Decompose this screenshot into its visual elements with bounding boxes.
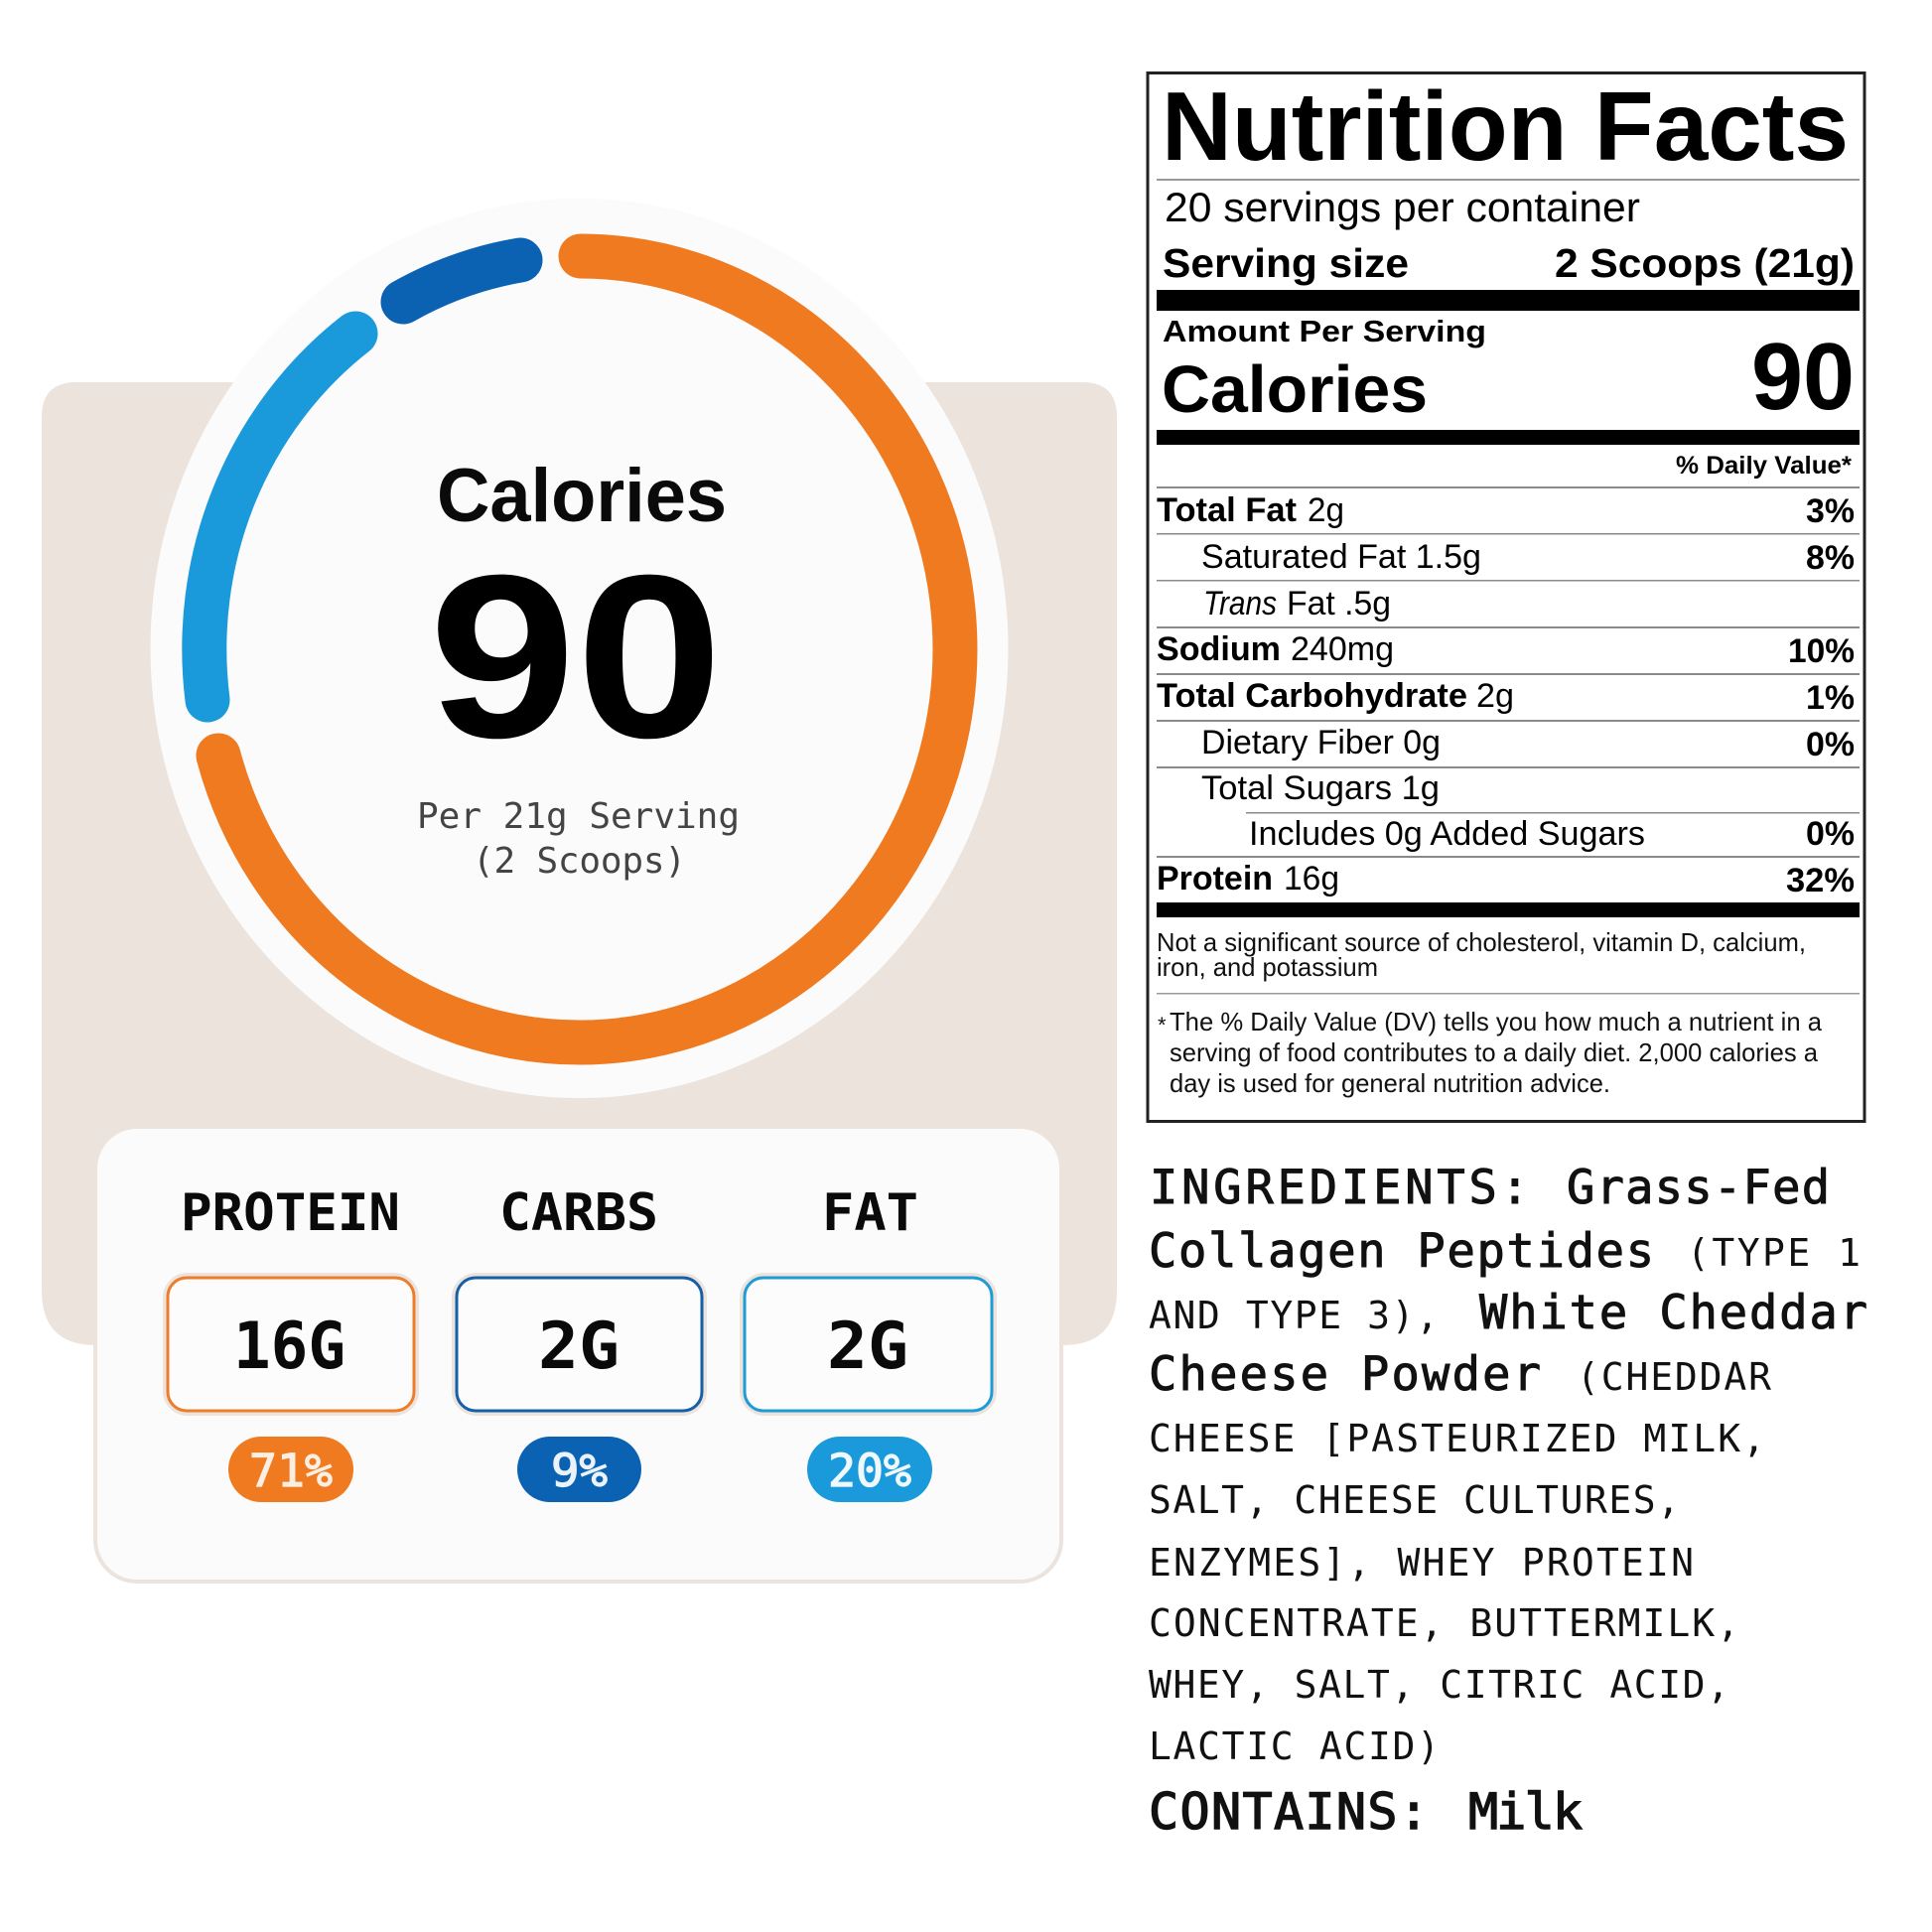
serving note: (2 Scoops) xyxy=(473,841,686,882)
macro box: carbs: 2G xyxy=(538,1310,620,1384)
row: protein: Protein xyxy=(1157,860,1273,897)
row: dietary fiber: Dietary Fiber 0g xyxy=(1201,724,1441,761)
panel: macro card xyxy=(95,1127,1061,1582)
ring segment: protein xyxy=(218,256,955,1042)
serving size: Serving size xyxy=(1163,240,1409,286)
pill: carbs percent: 9% xyxy=(551,1445,608,1497)
row: added sugars: Includes 0g Added Sugars xyxy=(1249,815,1645,853)
lines: sub-ingredients: SALT, CHEESE CULTURES, xyxy=(1149,1478,1680,1522)
ring segment: carbs xyxy=(403,260,520,302)
row: sodium: 240mg xyxy=(1291,630,1394,668)
row: total fat: 3% xyxy=(1806,492,1855,530)
servings: 20 servings per container xyxy=(1165,184,1640,230)
row: saturated fat: Saturated Fat 1.5g xyxy=(1201,538,1481,576)
panel: ingredients list xyxy=(1149,1161,1867,1841)
macro box: protein: 16G xyxy=(233,1310,345,1384)
lines: sub-ingredients xyxy=(1149,1417,1765,1768)
row: total carbohydrate xyxy=(1157,677,1855,717)
row: saturated fat xyxy=(1201,538,1855,577)
dial heading: Calories xyxy=(437,454,727,538)
lines: sub-ingredients: LACTIC ACID) xyxy=(1149,1725,1440,1768)
pill: fat percent xyxy=(807,1437,932,1502)
macro box: carbs xyxy=(455,1276,704,1413)
line: ingredients heading: INGREDIENTS: xyxy=(1150,1161,1529,1215)
serving note xyxy=(417,796,740,882)
line: cheese powder: (CHEDDAR xyxy=(1577,1355,1771,1399)
daily value heading: % Daily Value* xyxy=(1676,452,1852,480)
row: trans fat xyxy=(1203,585,1391,622)
line: white cheddar: White Cheddar xyxy=(1479,1286,1867,1340)
lines: sub-ingredients: CHEESE [PASTEURIZED MILK, xyxy=(1149,1417,1765,1460)
not a significant source note xyxy=(1157,927,1806,982)
line: contains allergen: Milk xyxy=(1468,1783,1583,1841)
lines: sub-ingredients: CONCENTRATE, BUTTERMILK, xyxy=(1149,1601,1739,1645)
calories row: 90 xyxy=(1751,324,1855,430)
row: dietary fiber: 0% xyxy=(1806,726,1855,763)
row: sodium: 10% xyxy=(1788,632,1855,670)
panel: nutrition facts label xyxy=(1148,71,1864,1122)
line: ingredients heading xyxy=(1150,1161,1830,1215)
daily value footnote: serving of food contributes to a daily diet. 2,000 calories a xyxy=(1170,1037,1819,1067)
line: white cheddar xyxy=(1149,1286,1867,1340)
row: trans fat: Fat .5g xyxy=(1287,585,1391,622)
macro labels xyxy=(181,1183,918,1243)
lines: sub-ingredients: ENZYMES], WHEY PROTEIN xyxy=(1149,1541,1694,1585)
macro labels: FAT xyxy=(822,1183,918,1243)
macro labels: PROTEIN xyxy=(181,1183,400,1243)
line: white cheddar: AND TYPE 3), xyxy=(1149,1294,1439,1337)
row: protein: 32% xyxy=(1786,862,1855,899)
panel: beige backdrop xyxy=(42,382,1117,1345)
line: contains allergen: CONTAINS: xyxy=(1149,1783,1429,1841)
serving size: 2 Scoops (21g) xyxy=(1555,240,1855,286)
nutrient rows xyxy=(1157,491,1855,899)
not a significant source note: iron, and potassium xyxy=(1157,952,1378,982)
lines: sub-ingredients: WHEY, SALT, CITRIC ACID, xyxy=(1149,1663,1729,1707)
row: total carbohydrate: 2g xyxy=(1476,677,1514,715)
row: sodium xyxy=(1157,630,1855,670)
row: trans fat: Trans xyxy=(1203,585,1277,622)
daily value footnote: * xyxy=(1158,1013,1167,1037)
row: protein: 16g xyxy=(1284,860,1339,897)
row: total sugars: Total Sugars 1g xyxy=(1201,769,1440,807)
serving note: Per 21g Serving xyxy=(417,796,740,837)
daily value footnote xyxy=(1158,1007,1823,1098)
card background xyxy=(95,1127,1061,1582)
pill: protein percent: 71% xyxy=(249,1445,333,1497)
amount per serving: Amount Per Serving xyxy=(1163,314,1486,348)
line: collagen peptides: Collagen Peptides xyxy=(1149,1224,1654,1279)
row: added sugars: 0% xyxy=(1806,815,1855,853)
line: contains allergen xyxy=(1149,1783,1583,1841)
macro box: fat xyxy=(743,1276,994,1413)
pill: protein percent xyxy=(228,1437,353,1502)
nutrient rules xyxy=(1157,486,1860,858)
row: total carbohydrate: 1% xyxy=(1806,679,1855,717)
white disc xyxy=(151,199,1009,1098)
panel: calorie dial xyxy=(151,199,1009,1098)
calories row: Calories xyxy=(1162,352,1428,427)
line: ingredients heading: Grass-Fed xyxy=(1567,1161,1830,1215)
macro labels: CARBS xyxy=(499,1183,658,1243)
daily value footnote: day is used for general nutrition advice. xyxy=(1170,1068,1610,1098)
calories row xyxy=(1162,324,1855,430)
row: saturated fat: 8% xyxy=(1806,539,1855,577)
row: total fat: 2g xyxy=(1308,491,1344,529)
serving size xyxy=(1163,240,1855,286)
row: dietary fiber xyxy=(1201,724,1855,763)
line: cheese powder xyxy=(1149,1347,1771,1402)
pill: carbs percent xyxy=(517,1437,641,1502)
row: total fat: Total Fat xyxy=(1157,491,1297,529)
macro box: fat: 2G xyxy=(827,1310,908,1384)
label title: Nutrition Facts xyxy=(1162,71,1849,181)
not a significant source note: Not a significant source of cholesterol, vitamin D, calcium, xyxy=(1157,927,1806,957)
row: protein xyxy=(1157,860,1855,899)
ring segment: fat xyxy=(205,334,355,700)
row: sodium: Sodium xyxy=(1157,630,1281,668)
macro box: protein xyxy=(166,1276,416,1413)
pill: fat percent: 20% xyxy=(828,1445,911,1497)
line: collagen peptides: (TYPE 1 xyxy=(1687,1231,1861,1275)
row: added sugars xyxy=(1249,815,1855,853)
daily value footnote: The % Daily Value (DV) tells you how much a nutrient in a xyxy=(1170,1007,1823,1036)
label border xyxy=(1148,73,1864,1122)
row: total carbohydrate: Total Carbohydrate xyxy=(1157,677,1467,715)
dial value: 90 xyxy=(429,526,723,786)
row: total fat xyxy=(1157,491,1855,530)
line: cheese powder: Cheese Powder xyxy=(1149,1347,1541,1402)
